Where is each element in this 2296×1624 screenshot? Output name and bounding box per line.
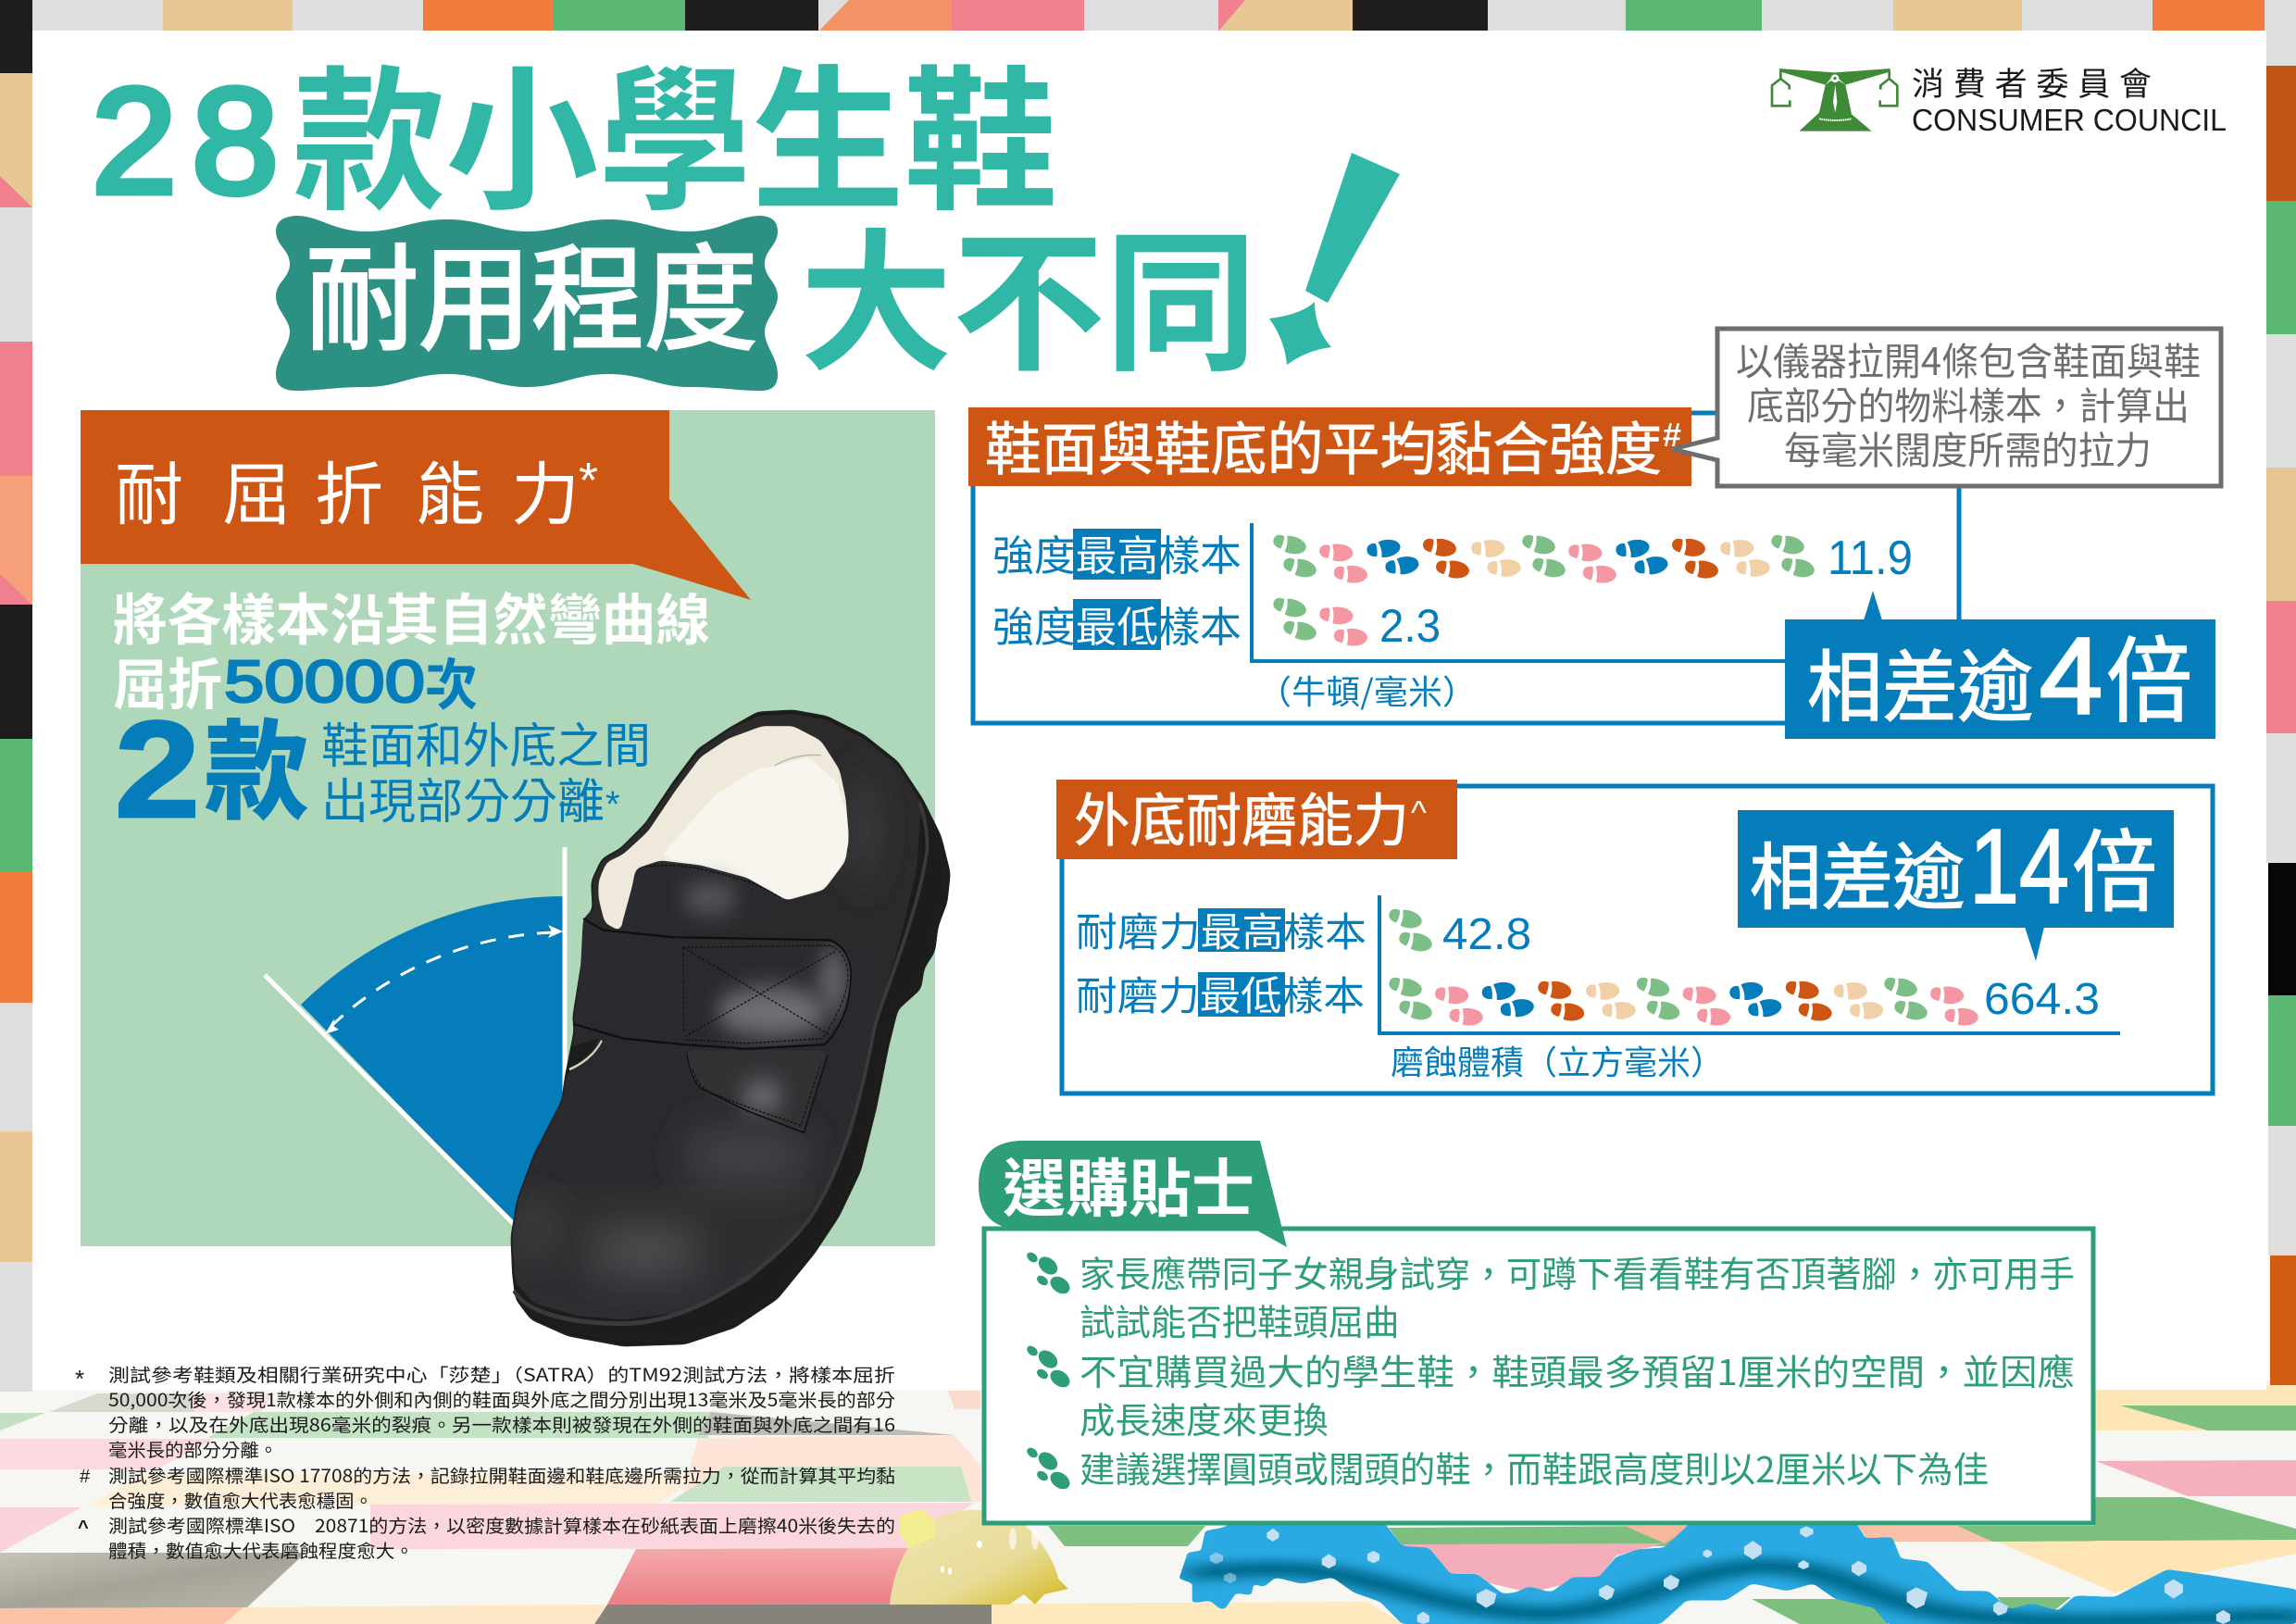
- exclamation mark: [1269, 153, 1400, 365]
- test method callout: [1672, 329, 2221, 486]
- orange heading bar: 鞋面與鞋底的平均黏合強度: [985, 403, 1662, 486]
- logo: Consumer Council: [1772, 58, 2227, 137]
- footnote: bond test: 測試參考國際標準ISO 17708的方法，記錄拉開鞋面邊和鞋底邊所需拉力，從而計算其平均黏: [108, 1461, 895, 1488]
- footnote: bond test: 合強度，數值愈大代表愈穩固。: [108, 1486, 373, 1513]
- panel: buying tips: [979, 1138, 2093, 1523]
- footnotes: [75, 1360, 895, 1563]
- panel: flex resistance: [81, 410, 951, 1346]
- orange ribbon heading: *: [579, 453, 598, 508]
- title: 28 款小學生鞋: 2: [92, 57, 177, 225]
- footprint bar: lowest 2.3: [1271, 595, 1441, 652]
- footprint bar: lowest 664.3: [1387, 975, 2100, 1026]
- footnote: abrasion test: [78, 1511, 895, 1563]
- page background floor collage: [0, 1380, 2296, 1624]
- test method callout: 底部分的物料樣本，計算出: [1747, 375, 2190, 431]
- callout: over 4 times: 倍: [2106, 606, 2192, 741]
- footnote: flex test: 測試參考鞋類及相關行業研究中心「莎楚」（SATRA）的TM92測試方法，將樣本屈折: [108, 1360, 895, 1387]
- callout: over 14 times: [1738, 801, 2174, 961]
- footprint bar: highest 42.8: 42.8: [1442, 910, 1531, 959]
- footprint bar: highest 11.9: 11.9: [1828, 531, 1913, 585]
- bending description: 次: [425, 641, 478, 721]
- title: 大不同: 大不同: [800, 181, 1257, 402]
- tip 1: [1025, 1246, 2075, 1346]
- result: 2 models: 2: [115, 693, 200, 846]
- footnote: flex test: 分離，以及在外底出現86毫米的裂痕。另一款樣本則被發現在外側的鞋面與外底之間有16: [108, 1410, 895, 1437]
- result: 2 models: [115, 685, 651, 846]
- footprint bar: lowest 2.3: 2.3: [1379, 600, 1441, 652]
- chart frame outline: [973, 413, 1959, 723]
- callout: over 14 times: 14: [1969, 808, 2069, 926]
- result: 2 models: *: [605, 784, 620, 825]
- footnote: flex test: [75, 1360, 895, 1462]
- panel: abrasion resistance: [1056, 774, 2213, 1093]
- title badge: 耐用程度: 耐用程度: [306, 206, 757, 373]
- illustration: blue squiggle: [1170, 1516, 2296, 1624]
- tips box: [984, 1229, 2093, 1523]
- footnote: flex test: 毫米長的部分分離。: [108, 1435, 278, 1462]
- footprint bar: lowest 664.3: 664.3: [1984, 975, 2100, 1024]
- logo Chinese name: 消費者委員會: [1912, 58, 2152, 106]
- axis unit: （牛頓/毫米）: [1257, 666, 1477, 714]
- title: 28 款小學生鞋: 8: [192, 57, 279, 225]
- bending description: [113, 576, 710, 721]
- shoe photo illustration: [509, 710, 951, 1346]
- tip 1: 家長應帶同子女親身試穿，可蹲下看看鞋有否頂著腳，亦可用手: [1079, 1246, 2075, 1298]
- test method callout: 以儀器拉開4條包含鞋面與鞋: [1736, 331, 2201, 386]
- callout: over 4 times: 相差逾: [1807, 626, 2033, 738]
- tip 3: 建議選擇圓頭或闊頭的鞋，而鞋跟高度則以2厘米以下為佳: [1079, 1442, 1989, 1493]
- chart frame outline: [1062, 786, 2213, 1093]
- orange ribbon heading: 耐屈折能力: [115, 440, 580, 539]
- footnote: bond test: [80, 1461, 895, 1513]
- callout: over 14 times: 倍: [2072, 801, 2157, 930]
- bending angle diagram: [263, 847, 567, 1226]
- panel: bond strength: [968, 329, 2221, 741]
- orange heading bar: 外底耐磨能力: [1074, 774, 1409, 857]
- result: 2 models: 鞋面和外底之間: [321, 707, 651, 777]
- callout: over 4 times: [1785, 591, 2215, 741]
- orange heading bar: ^: [1411, 793, 1427, 831]
- row label: highest abrasion resistance: 耐磨力最高樣本: [1076, 901, 1366, 958]
- tip 1: 試試能否把鞋頭屈曲: [1079, 1294, 1400, 1346]
- result: 2 models: 出現部分分離: [321, 763, 605, 832]
- tips tab heading: 選購貼士: [1003, 1138, 1254, 1230]
- callout: over 14 times: 相差逾: [1750, 820, 1965, 924]
- footnote: abrasion test: ^: [78, 1518, 89, 1538]
- orange ribbon heading: [81, 410, 751, 600]
- callout: over 4 times: 4: [2040, 615, 2103, 736]
- footprint bar: highest 42.8: [1387, 906, 1531, 959]
- mint panel background: [81, 410, 935, 1246]
- row label: lowest abrasion resistance: 耐磨力最低樣本: [1076, 965, 1365, 1022]
- test method callout: 每毫米闊度所需的拉力: [1784, 419, 2152, 475]
- footnote: abrasion test: 體積，數值愈大代表磨蝕程度愈大。: [108, 1536, 414, 1563]
- footnote: abrasion test: 測試參考國際標準ISO 20871的方法，以密度數據計算樣本在砂紙表面上磨擦40米後失去的: [108, 1511, 895, 1538]
- tip 2: 不宜購買過大的學生鞋，鞋頭最多預留1厘米的空間，並因應: [1079, 1344, 2075, 1396]
- illustration: yellow blob: [890, 1509, 1068, 1605]
- orange heading bar: #: [1663, 416, 1681, 454]
- footnote: flex test: 50,000次後，發現1款樣本的外側和內側的鞋面與外底之間分別出現13毫米及5毫米長的部分: [108, 1385, 895, 1412]
- axis unit: 磨蝕體積（立方毫米）: [1391, 1036, 1724, 1084]
- tip 2: 成長速度來更換: [1079, 1393, 1329, 1444]
- row label: highest strength: 強度最高樣本: [992, 522, 1242, 582]
- logo symbol: [1772, 69, 1897, 131]
- bending description: 屈折: [113, 641, 222, 721]
- title: 28 款小學生鞋: 款小學生鞋: [293, 17, 1057, 242]
- footprint bar: highest 11.9: [1271, 531, 1913, 585]
- chart axes: [1379, 895, 2120, 1033]
- bending description: 將各樣本沿其自然彎曲線: [113, 576, 710, 656]
- footnote: bond test: #: [80, 1467, 91, 1487]
- result: 2 models: 款: [205, 685, 308, 841]
- footnote: flex test: *: [75, 1365, 84, 1393]
- bending description: 50000: [224, 648, 425, 715]
- tips tab heading: [979, 1138, 1287, 1247]
- row label: lowest strength: 強度最低樣本: [992, 593, 1242, 654]
- logo English name: CONSUMER COUNCIL: [1912, 103, 2227, 137]
- chart axes: [1252, 523, 1785, 661]
- tip 2: [1025, 1343, 2075, 1444]
